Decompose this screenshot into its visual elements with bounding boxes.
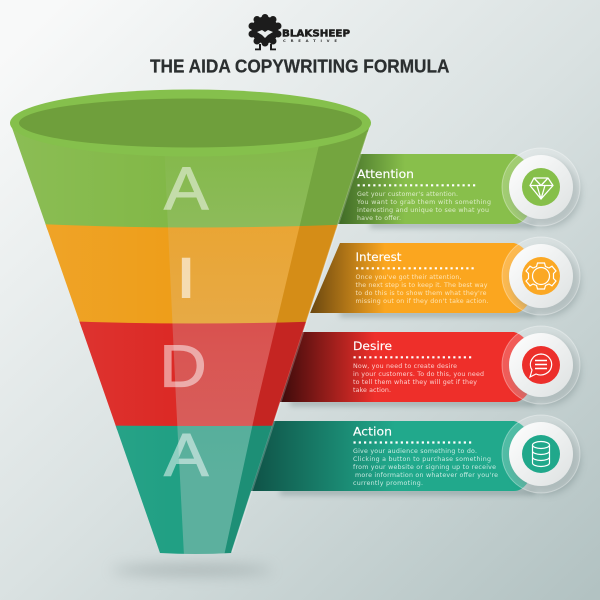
- icon: diamond: [530, 178, 553, 199]
- heading: Attention: [357, 167, 414, 181]
- body text: Clicking a button to purchase something: [353, 456, 491, 463]
- body text: take action.: [353, 387, 391, 394]
- panel: Attention: [338, 148, 580, 227]
- body text: to do this is to show them what they're: [356, 290, 487, 297]
- dotted divider: [354, 441, 474, 444]
- ribbon: [250, 421, 528, 491]
- body text: in your customers. To do this, you need: [353, 371, 484, 378]
- panel: Action: [250, 415, 580, 494]
- funnel left shading: [12, 129, 90, 338]
- body text: [353, 363, 484, 394]
- funnel edge highlight: [232, 132, 368, 552]
- logo subtitle: CREATIVE: [283, 38, 337, 43]
- badge: [502, 415, 580, 494]
- dotted divider: [354, 356, 474, 358]
- ribbon shadows: [280, 222, 535, 495]
- heading: Interest: [356, 250, 402, 264]
- ribbon: [262, 332, 528, 402]
- letter A: A: [164, 422, 208, 488]
- badge: [502, 148, 580, 227]
- body text: You want to grab them with something: [356, 199, 491, 206]
- body text: Now, you need to create desire: [353, 363, 457, 370]
- funnel segment: orange: [46, 224, 338, 330]
- letter I: I: [178, 246, 194, 311]
- body text: Once you've got their attention,: [356, 274, 462, 281]
- heading: Desire: [353, 339, 392, 353]
- funnel opening: [19, 98, 362, 148]
- body text: interesting and unique to see what you: [357, 207, 489, 214]
- body text: [356, 274, 488, 305]
- heading: Action: [353, 424, 392, 438]
- ribbon: [310, 243, 528, 313]
- body text: currently promoting.: [353, 480, 423, 487]
- icon: database: [532, 442, 550, 466]
- icon: sheep: [248, 14, 282, 50]
- title: THE AIDA COPYWRITING FORMULA: [150, 56, 450, 76]
- ribbon: [338, 154, 528, 224]
- funnel rim: [10, 90, 371, 156]
- funnel: [10, 90, 371, 554]
- logo wordmark: BLAKSHEEP: [282, 28, 350, 40]
- body text: Give your audience something to do.: [353, 448, 477, 455]
- funnel shadow: [112, 565, 272, 575]
- logo: Blaksheep Creative: [248, 14, 350, 50]
- dotted divider: [356, 267, 476, 269]
- body text: missing out on if they don't take action.: [356, 298, 488, 305]
- funnel segment: red: [80, 322, 306, 430]
- funnel segment: green: [10, 122, 371, 230]
- body text: [356, 191, 491, 222]
- panel: Desire: [262, 326, 580, 405]
- funnel light reflection: [166, 171, 312, 554]
- body text: have to offer.: [357, 215, 401, 222]
- badge: [502, 237, 580, 316]
- funnel right shade: [224, 120, 380, 556]
- panel: Interest: [310, 237, 580, 316]
- body text: more information on whatever offer you're: [355, 472, 498, 479]
- body text: [353, 448, 498, 487]
- badge: [502, 326, 580, 405]
- body text: the next step is to keep it. The best way: [356, 282, 488, 289]
- body text: to tell them what they will get if they: [353, 379, 477, 386]
- letter A: A: [164, 155, 208, 222]
- funnel segment: teal: [116, 426, 272, 554]
- body text: from your website or signing up to receive: [353, 464, 496, 471]
- icon: speech bubble: [530, 354, 552, 377]
- icon: gear: [526, 263, 556, 289]
- body text: Get your customer's attention.: [357, 191, 458, 198]
- letter D: D: [160, 334, 206, 400]
- dotted divider: [358, 184, 478, 186]
